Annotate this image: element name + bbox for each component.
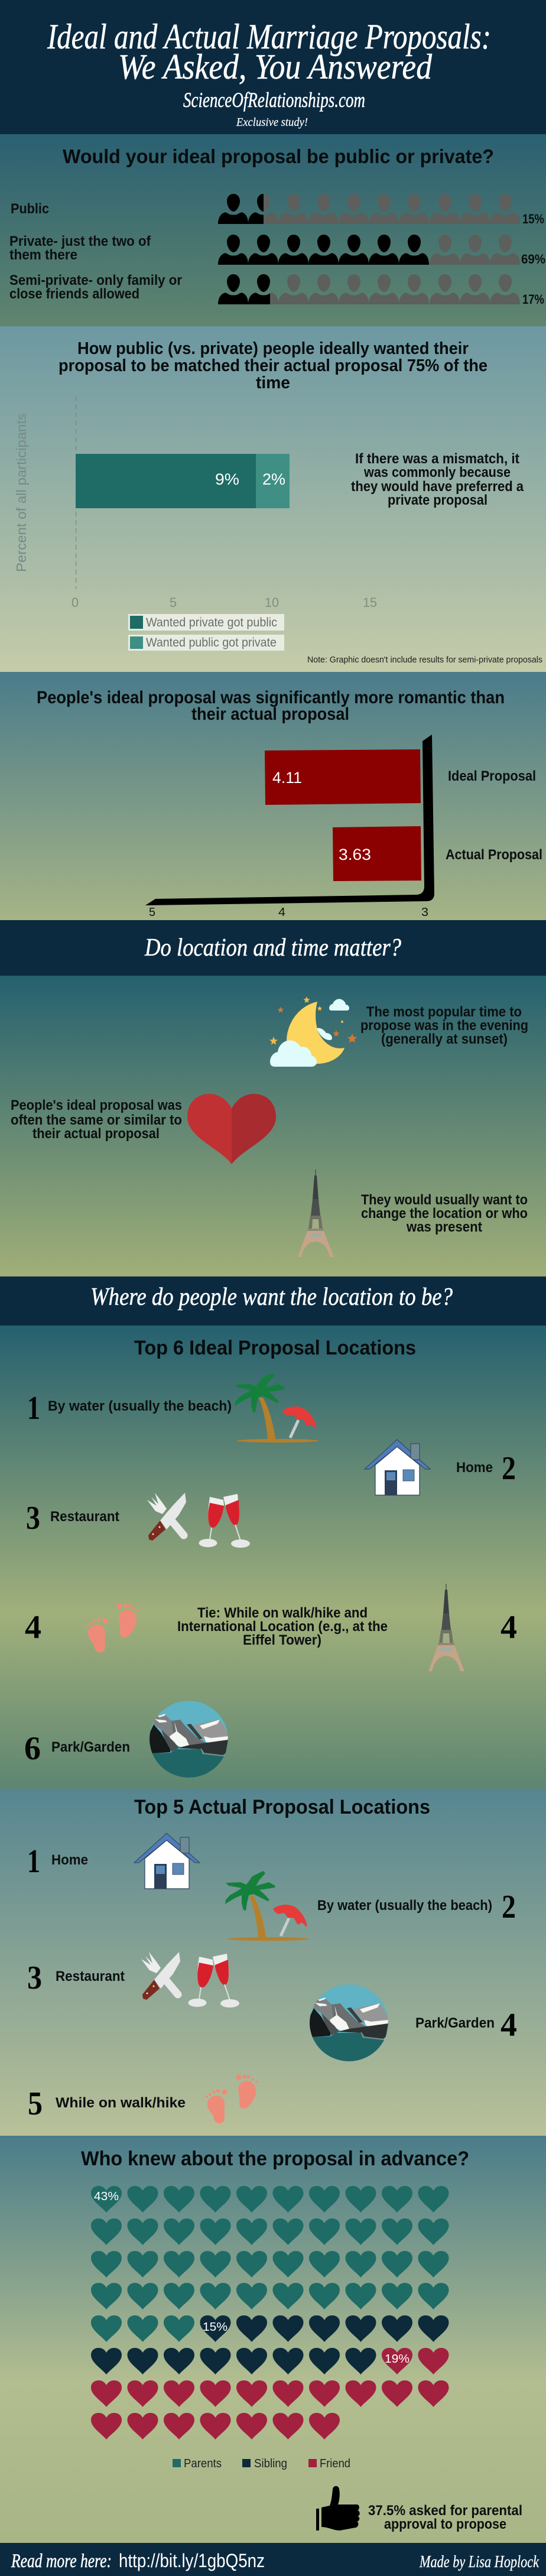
heading: People's ideal proposal was significantly more romantic than: [37, 688, 505, 707]
value: 3.63: 3.63: [339, 846, 371, 863]
icon: house: [134, 1833, 200, 1889]
label: private: Private- just the two of: [9, 233, 151, 249]
bar chart: [14, 396, 377, 610]
callout: mismatch: If there was a mismatch, it: [355, 451, 519, 467]
text: most popular time: [360, 1004, 528, 1047]
item 3: restaurant: 3: [26, 1500, 40, 1536]
heading: Top 5 Actual Proposal Locations: [134, 1796, 430, 1818]
label: private: [9, 233, 151, 263]
pictogram row: public: [11, 194, 544, 226]
heart grid: [91, 2186, 449, 2439]
value: 2%: 2%: [262, 470, 285, 488]
text: most popular time: The most popular time to: [366, 1004, 522, 1020]
heading: Would your ideal proposal be public or private?: [63, 145, 494, 167]
icon: cutlery: [147, 1493, 186, 1541]
item 4: park: [310, 1984, 517, 2062]
tagline: Exclusive study!: [236, 116, 308, 129]
item 3: restaurant: [27, 1952, 239, 2007]
item 1: by water: 1: [27, 1390, 40, 1427]
item 5: walk: While on walk/hike: [56, 2095, 186, 2111]
icon: cutlery: [141, 1952, 180, 2000]
item 2: home: 2: [502, 1450, 516, 1487]
text: ideal same as actual: People's ideal proposal was: [11, 1097, 182, 1113]
bar: ideal proposal: [265, 749, 421, 805]
text: change location: They would usually want to: [361, 1192, 528, 1208]
legend: Sibling: [254, 2457, 287, 2470]
heading: How public (vs. private) people ideally wanted their: [77, 339, 469, 358]
item 2: by water: [225, 1871, 516, 1941]
item 1: home: 1: [27, 1843, 40, 1880]
label: ideal proposal: Ideal Proposal: [448, 768, 536, 784]
heading: Where do people want the location to be?: [90, 1284, 453, 1311]
legend: [128, 614, 284, 651]
value: 43%: 43%: [94, 2190, 119, 2203]
icon: mountain lake: [150, 1701, 228, 1778]
icon: footprints: [86, 1603, 138, 1652]
title: We Asked, You Answered: [118, 47, 433, 86]
icon: wine glasses: [199, 1494, 250, 1548]
item 4: park: 4: [500, 2007, 517, 2044]
site name: ScienceOfRelationships.com: [183, 88, 365, 112]
heading: [58, 339, 488, 392]
read more label: Read more here:: [11, 2551, 112, 2572]
x axis ticks: [72, 595, 377, 610]
legend: Wanted public got private: [146, 636, 277, 649]
item 1: home: Home: [51, 1852, 88, 1868]
item 4: tie: 4: [500, 1609, 517, 1646]
item 1: by water: [27, 1373, 318, 1443]
text: tie: Tie: While on walk/hike and: [197, 1605, 368, 1621]
item 3: restaurant: 3: [27, 1960, 42, 1996]
panel: public or private: [0, 134, 546, 326]
item 1: by water: By water (usually the beach): [48, 1398, 232, 1414]
value: 19%: 19%: [385, 2353, 410, 2366]
legend: Wanted private got public: [146, 616, 277, 629]
item 5: walk: [28, 2074, 258, 2123]
callout: mismatch: was commonly because: [363, 464, 511, 480]
heading: Do location and time matter?: [144, 934, 401, 961]
item 4: tie: 4: [25, 1609, 41, 1646]
title: [47, 17, 491, 86]
x axis ticks: 10: [265, 595, 279, 610]
panel: romantic: [0, 672, 546, 920]
y axis title: Percent of all participants: [14, 413, 29, 572]
icon: heart: [187, 1094, 276, 1164]
callout: mismatch: they would have preferred a: [351, 479, 524, 495]
icon: house: [365, 1440, 430, 1495]
item 3: restaurant: [26, 1493, 250, 1548]
axis ticks: [149, 906, 428, 919]
panel: location and time: [0, 976, 546, 1276]
link: http://bit.ly/1gbQ5nz: [119, 2550, 265, 2571]
item 3: restaurant: Restaurant: [56, 1968, 125, 1984]
bar: wanted public got private: [256, 454, 290, 508]
legend: [173, 2457, 350, 2470]
label: semi-private: close friends allowed: [9, 286, 139, 302]
item 2: home: [365, 1440, 516, 1495]
bar: wanted private got public: [76, 454, 256, 508]
text: ideal same as actual: often the same or similar to: [11, 1112, 182, 1128]
heading: Who knew about the proposal in advance?: [81, 2148, 469, 2170]
icon: moon and clouds: [269, 996, 357, 1067]
x axis ticks: 0: [72, 595, 79, 610]
heading: Top 6 Ideal Proposal Locations: [134, 1337, 416, 1359]
value: 15%: 15%: [203, 2321, 228, 2334]
axis ticks: 5: [149, 906, 155, 919]
banner: where do people want: [0, 1276, 546, 1326]
text: most popular time: propose was in the evening: [360, 1018, 528, 1034]
icon: wine glasses: [188, 1954, 239, 2007]
item 4: tie: [25, 1584, 517, 1671]
axis: [145, 735, 434, 905]
heading: proposal to be matched their actual proposal 75% of the: [58, 356, 488, 375]
item 4: park: Park/Garden: [415, 2015, 495, 2031]
panel: top 6 ideal locations: [0, 1326, 546, 1789]
label: public: Public: [11, 201, 49, 217]
icon: eiffel tower: [428, 1584, 464, 1671]
axis ticks: 3: [421, 906, 428, 919]
item 2: home: Home: [456, 1460, 493, 1476]
value: 4.11: 4.11: [272, 769, 302, 787]
pictogram row: semi-private: [9, 274, 544, 304]
icon: thumbs up: [316, 2486, 360, 2530]
axis ticks: 4: [278, 906, 285, 919]
item 6: park: 6: [24, 1730, 41, 1767]
item 2: by water: 2: [502, 1889, 516, 1925]
callout: mismatch: [351, 451, 524, 508]
item 6: park: Park/Garden: [51, 1739, 130, 1755]
text: ideal same as actual: [11, 1097, 182, 1142]
callout: parental approval: [368, 2503, 522, 2532]
panel: header: [0, 0, 546, 134]
callout: parental approval: 37.5% asked for parental: [368, 2503, 522, 2519]
legend: Parents: [184, 2457, 222, 2470]
heading: their actual proposal: [191, 704, 349, 724]
banner: location and time: [0, 920, 546, 976]
value: 9%: 9%: [215, 470, 239, 488]
text: change location: was present: [406, 1219, 482, 1235]
text: tie: [177, 1605, 388, 1648]
callout: mismatch: private proposal: [388, 492, 488, 508]
icon: mountain lake: [310, 1984, 388, 2062]
panel: ideal vs actual match: [0, 326, 546, 672]
footer: [0, 2543, 546, 2576]
callout: parental approval: approval to propose: [384, 2516, 506, 2532]
item 2: by water: By water (usually the beach): [317, 1898, 492, 1914]
label: semi-private: [9, 272, 182, 302]
text: tie: International Location (e.g., at the: [177, 1619, 388, 1635]
item 5: walk: 5: [28, 2086, 43, 2122]
item 6: park: [24, 1701, 228, 1778]
icon: palm and umbrella: [225, 1871, 309, 1941]
x axis ticks: 5: [170, 595, 177, 610]
x axis ticks: 15: [363, 595, 377, 610]
label: semi-private: Semi-private- only family or: [9, 272, 182, 288]
panel: top 5 actual locations: [0, 1789, 546, 2136]
item 3: restaurant: Restaurant: [50, 1509, 119, 1525]
label: private: them there: [9, 247, 77, 263]
item 1: home: [27, 1833, 200, 1889]
heading: [37, 688, 505, 724]
icon: palm and umbrella: [235, 1373, 318, 1443]
heading: time: [256, 373, 290, 392]
text: tie: Eiffel Tower): [243, 1632, 321, 1648]
text: ideal same as actual: their actual proposal: [32, 1126, 160, 1142]
text: change location: change the location or who: [361, 1206, 528, 1222]
text: most popular time: (generally at sunset): [381, 1031, 508, 1047]
bar: actual proposal: [333, 826, 421, 881]
text: change location: [361, 1192, 528, 1235]
icon: footprints: [206, 2074, 258, 2123]
panel: who knew: [0, 2136, 546, 2543]
pictogram row: private: [9, 233, 545, 267]
icon: eiffel tower: [298, 1170, 334, 1257]
legend: Friend: [320, 2457, 350, 2470]
chart: romance ratings: [145, 735, 542, 919]
